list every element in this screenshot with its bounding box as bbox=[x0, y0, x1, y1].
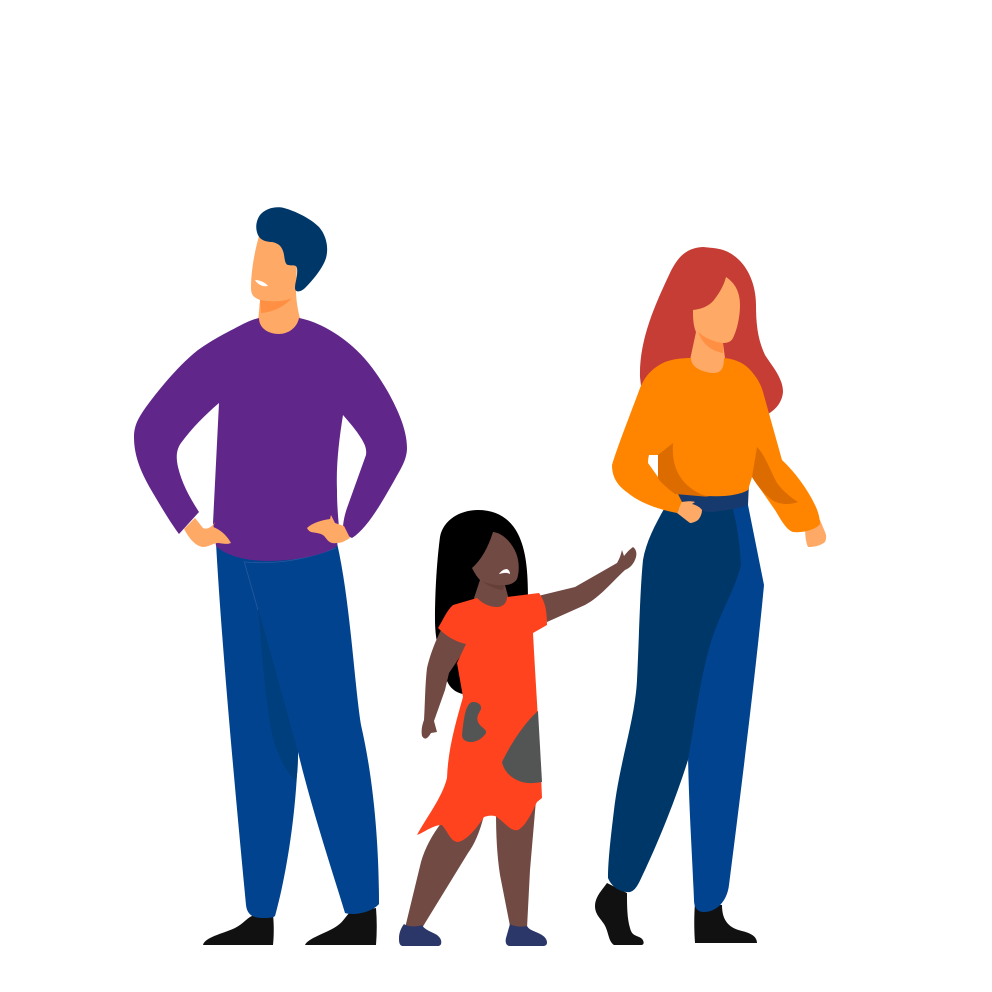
man: mouth bbox=[255, 280, 268, 286]
man: neck and face bbox=[251, 236, 301, 340]
man: right hand bbox=[307, 515, 350, 543]
woman: sweater body shadow bbox=[658, 443, 710, 497]
girl: right leg bbox=[496, 800, 536, 928]
girl: large dress patch bbox=[502, 711, 542, 783]
man: neck shadow bbox=[260, 298, 292, 313]
woman: waist hand bbox=[677, 501, 702, 523]
girl: right shoe bbox=[506, 924, 547, 946]
woman: white gap between arm and body bbox=[648, 455, 658, 477]
man: left shoe bbox=[203, 914, 274, 945]
woman: face and neck bbox=[690, 277, 740, 380]
girl: lowered arm bbox=[422, 630, 470, 739]
girl: mouth bbox=[499, 569, 510, 574]
woman: left foot bbox=[595, 883, 644, 945]
woman: orange sweater bbox=[612, 358, 820, 532]
man: hair bbox=[256, 207, 327, 291]
woman: hair bbox=[640, 247, 783, 420]
girl: orange dress bbox=[417, 593, 547, 842]
girl: neck shadow bbox=[482, 581, 505, 590]
man: purple sweater bbox=[134, 318, 407, 561]
girl: small dress patch bbox=[462, 702, 486, 742]
woman: waist band bbox=[672, 482, 749, 512]
figure: man bbox=[134, 207, 407, 945]
man: right shoe bbox=[305, 908, 377, 945]
woman: sleeve shadow bbox=[752, 447, 798, 504]
man: trouser fold shadow bbox=[258, 608, 298, 782]
woman: swinging hand bbox=[805, 520, 826, 547]
girl: face and neck bbox=[472, 532, 519, 614]
man: left hand bbox=[184, 518, 231, 547]
man: trousers bbox=[216, 543, 379, 918]
girl: hair bbox=[435, 510, 528, 694]
girl: raised arm bbox=[538, 547, 636, 622]
girl: left shoe bbox=[399, 924, 441, 946]
man: trouser seam bbox=[244, 548, 336, 610]
woman: neck shadow bbox=[698, 332, 723, 353]
girl: left leg bbox=[405, 815, 484, 928]
woman: trousers darker leg bbox=[608, 509, 741, 892]
woman: right foot bbox=[694, 903, 757, 943]
woman: trousers lighter leg bbox=[688, 505, 764, 912]
figure: girl bbox=[399, 510, 636, 946]
figure: woman bbox=[595, 247, 826, 945]
